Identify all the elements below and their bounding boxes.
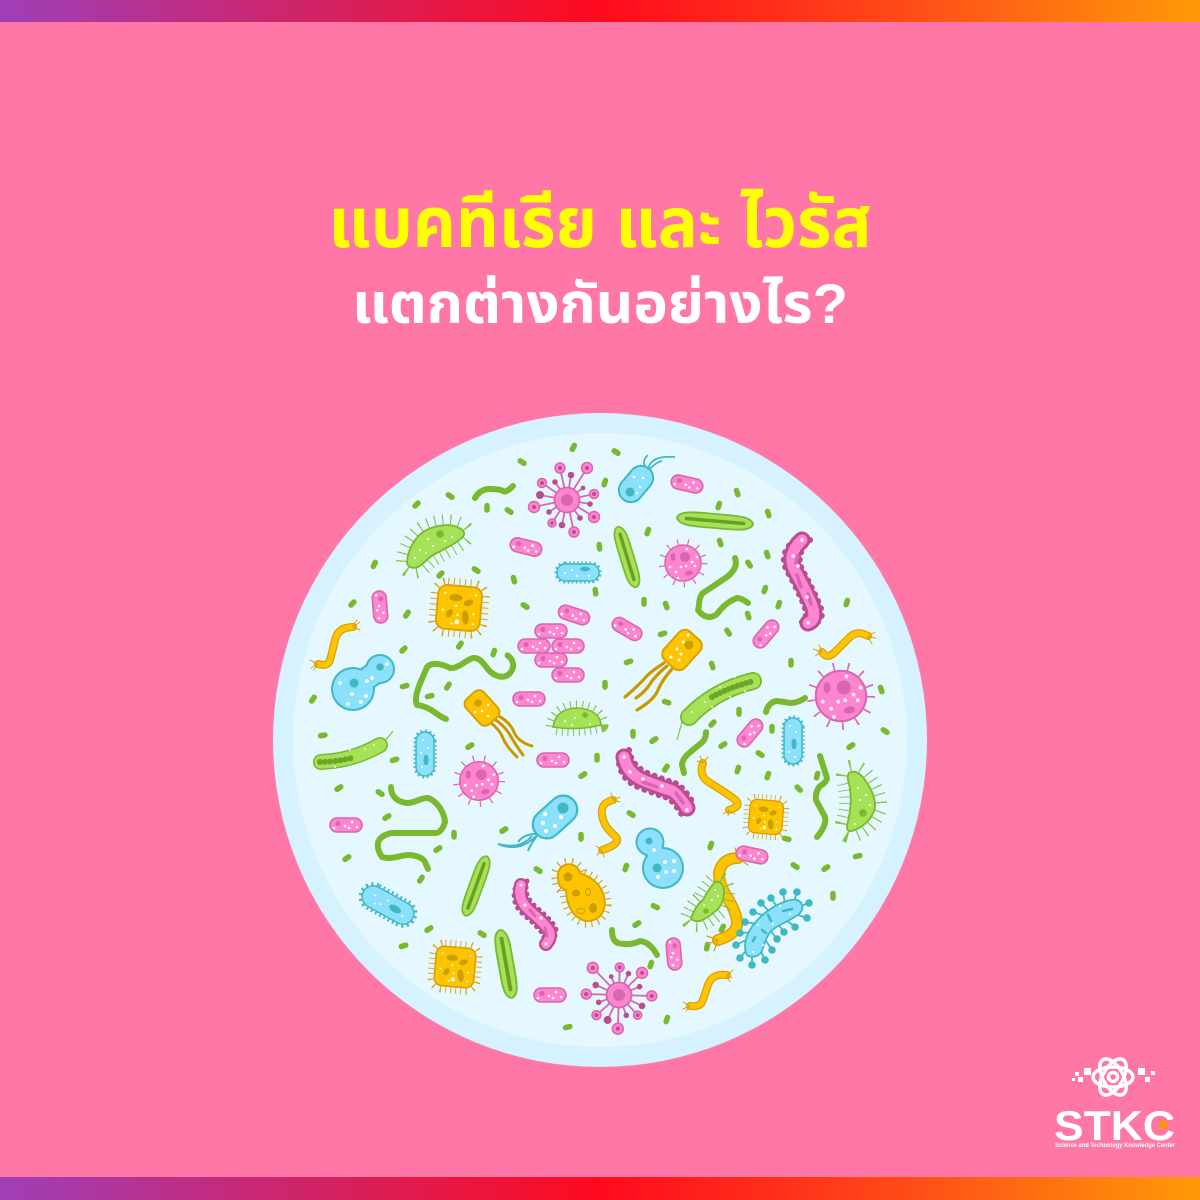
subtitle: how are they different: แตกต่างกันอย่างไร? [352, 272, 848, 335]
yellow worm centre left [596, 793, 620, 857]
yellow worm centre right [697, 756, 738, 816]
blue studded rods [358, 564, 802, 928]
yellow flagellate right [625, 627, 705, 710]
green hairy bacterium top left [407, 525, 464, 568]
green hairy bacterium over worm [691, 882, 724, 921]
blue peanut cell centre [636, 828, 684, 889]
green capsule bacteria [459, 511, 754, 999]
logo pixel dots [1072, 1068, 1155, 1082]
dish rim [273, 413, 927, 1067]
yellow flagellate left [462, 687, 532, 757]
petri dish illustration [273, 413, 927, 1067]
atom icon [1093, 1055, 1133, 1099]
magenta bumpy worm centre [619, 750, 692, 815]
magenta bumpy worm right [784, 540, 822, 623]
bottom gradient bar [0, 1177, 1200, 1200]
blue flagellate centre [498, 790, 583, 851]
STKC wordmark: STKC [1054, 1102, 1175, 1149]
STKC logo [1054, 1055, 1176, 1149]
pink spiky cells [458, 544, 868, 802]
yellow worm upper right [813, 632, 876, 656]
pink rod bacteria [330, 474, 782, 1002]
pink viruses [528, 462, 663, 1041]
pink rod on worm [735, 845, 769, 865]
top gradient bar [0, 0, 1200, 22]
blue peanut cell left [331, 654, 395, 711]
green beaded bacterium lower left [320, 731, 393, 767]
title: bacteria and viruses: แบคทีเรีย และ ไวรัส [328, 184, 872, 262]
large yellow worm [707, 848, 748, 951]
blue studded curved bacterium [732, 888, 813, 969]
magenta bumpy worm lower [514, 881, 556, 948]
yellow square bacteria [434, 584, 784, 988]
yellow worm lower [683, 970, 733, 1011]
yellow peanut cell [558, 864, 605, 921]
green hairy bacterium right [847, 772, 875, 831]
green hairy bacterium centre [553, 708, 601, 729]
green beaded bacterium upper right [677, 677, 754, 740]
blue flagellate top [614, 455, 675, 507]
logo tagline: Science and Technology Knowledge Center [1055, 1143, 1176, 1149]
dish interior [293, 433, 907, 1047]
logo orange dot [1158, 1120, 1168, 1130]
yellow worm upper left [310, 620, 360, 670]
green bacterial chains [378, 486, 827, 955]
small green rod bacteria [311, 444, 888, 1028]
